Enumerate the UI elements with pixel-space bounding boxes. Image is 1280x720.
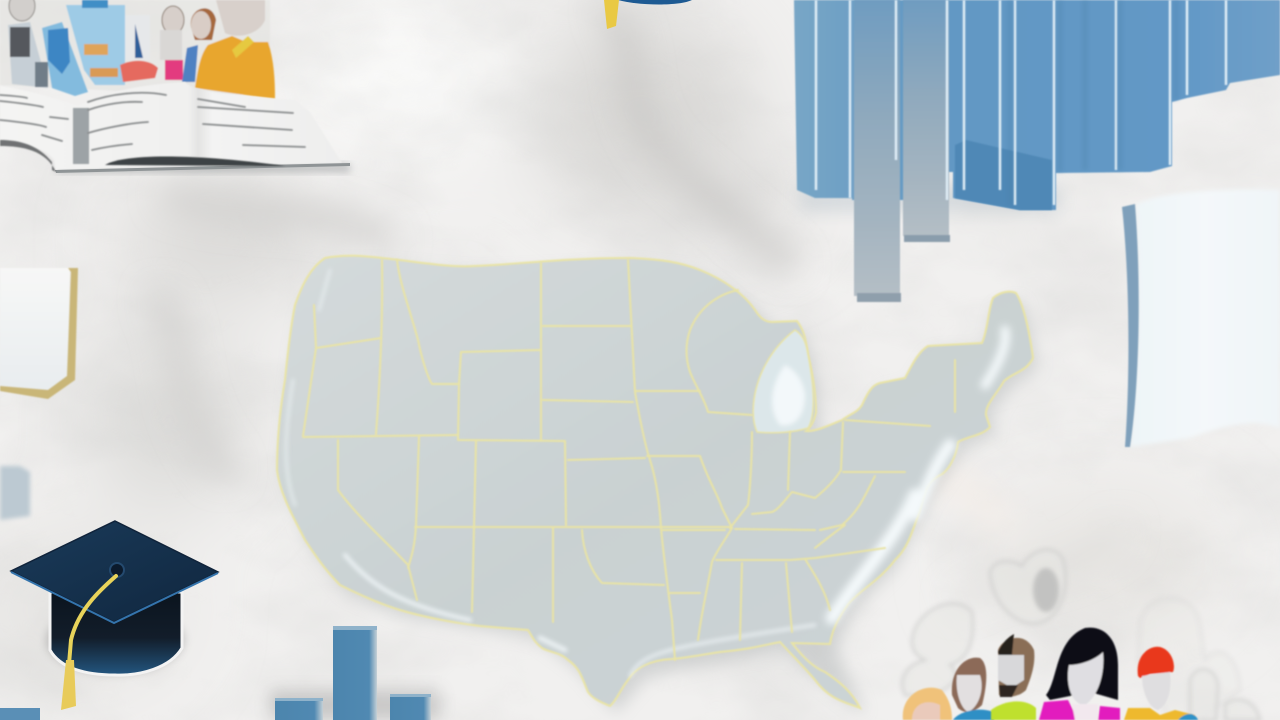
book text lines: [0, 93, 305, 150]
person: dark blue tie: [125, 15, 150, 60]
cap top: [11, 521, 218, 622]
person: adult in yellow: [195, 0, 275, 99]
white panel, right: [1122, 189, 1280, 447]
person: red hair, yellow shirt: [1124, 647, 1198, 720]
small bar, bottom left: [0, 708, 40, 720]
state borders: [303, 260, 955, 660]
person: blue figure: [42, 22, 88, 96]
person: grey figure: [8, 0, 48, 88]
cap base: [50, 592, 182, 675]
blue glass bar chart, top right: [794, 0, 1280, 302]
person: woman with black hair, magenta top: [1039, 628, 1120, 720]
Lake Michigan: [753, 330, 813, 433]
USA map: [277, 256, 1039, 716]
bar chart, bottom centre: [270, 626, 440, 720]
people group, bottom right: [902, 550, 1260, 720]
coastal gloss: [832, 330, 1006, 618]
medium grey bar: [903, 0, 950, 242]
tall grey bar: [854, 0, 901, 302]
map body: [277, 256, 1033, 708]
open book: [0, 82, 350, 173]
partial graduation cap, top centre: [604, 0, 692, 29]
chart bar 1: [275, 698, 323, 720]
person: blond child: [903, 688, 952, 720]
person: light blue figure: [66, 0, 125, 85]
person: small girl: [160, 6, 184, 80]
cap tassel: [69, 576, 116, 664]
chart bar 2: [333, 626, 377, 720]
people group, top left: [0, 0, 275, 99]
person: boy with brown hair: [182, 8, 216, 82]
chart bar 3: [390, 694, 431, 720]
faded sketch figures: [902, 550, 1260, 720]
darker water reflection: [955, 140, 1052, 210]
person: bearded man, green shirt: [991, 634, 1036, 720]
small grey block, left: [0, 466, 30, 520]
person: coral figure: [120, 61, 158, 82]
person: brown hair, blue shirt: [952, 658, 994, 720]
graduation cap: [11, 521, 218, 710]
bar highlights: [816, 0, 1226, 205]
paper note, left: [0, 268, 78, 399]
